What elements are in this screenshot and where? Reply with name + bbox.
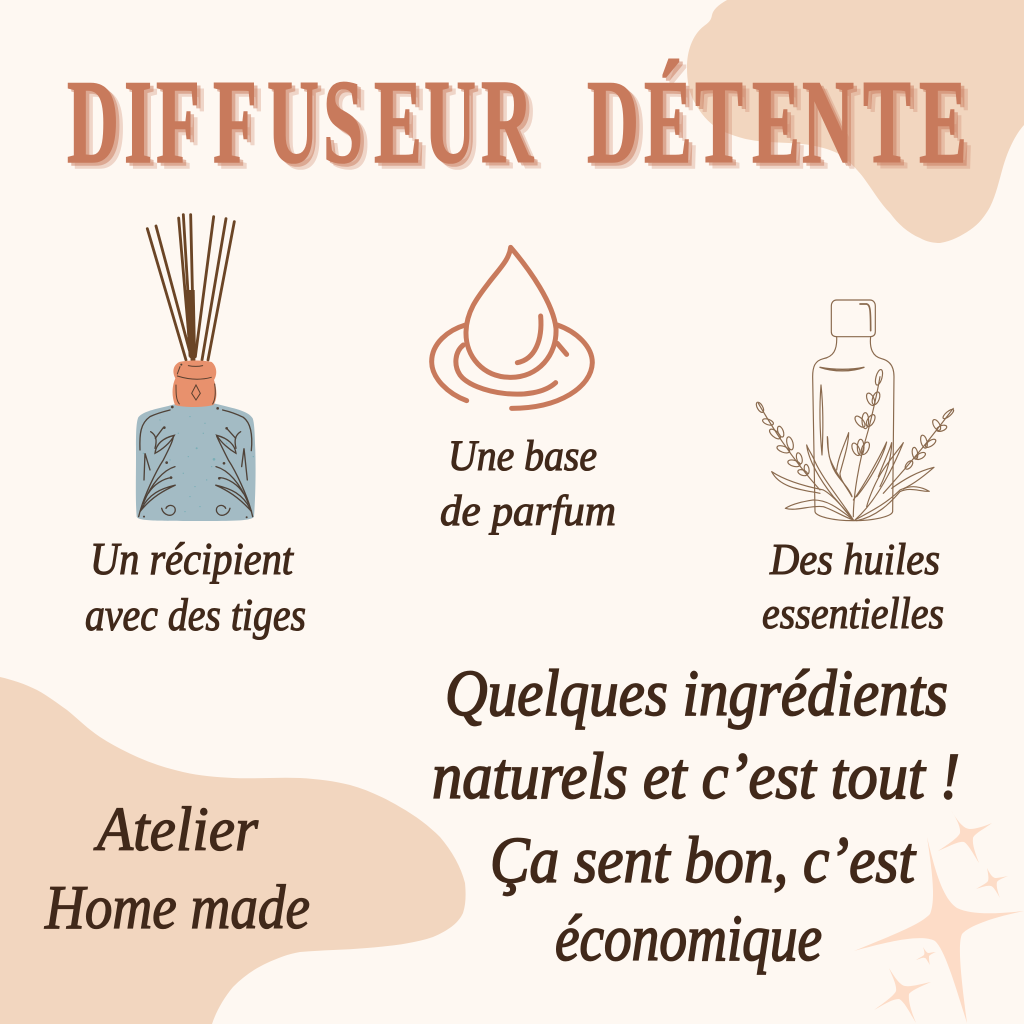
label: une base de parfum — [440, 433, 616, 535]
leaves — [772, 472, 853, 520]
main text block — [432, 657, 960, 975]
bottle speckles — [143, 416, 254, 512]
bottle foliage — [139, 410, 253, 517]
brand text: atelier home made: Home made — [44, 874, 310, 942]
label: un récipient avec des tiges — [85, 534, 306, 640]
label: un récipient avec des tiges: Un récipient — [90, 534, 294, 584]
label: des huiles essentielles: essentielles — [762, 589, 944, 638]
central lavender — [853, 377, 880, 517]
label: un récipient avec des tiges: avec des tiges — [85, 590, 306, 640]
brand text: atelier home made: Atelier — [93, 796, 259, 864]
title: DÉTENTE — [587, 56, 967, 189]
reeds — [147, 215, 234, 360]
bottle body — [136, 400, 256, 521]
label: des huiles essentielles — [762, 535, 944, 638]
main text block: Quelques ingrédients — [445, 657, 948, 730]
main text block: naturels et c’est tout ! — [432, 740, 960, 813]
icon: reed diffuser bottle — [136, 215, 256, 521]
brand text: atelier home made — [44, 796, 310, 942]
label: une base de parfum: de parfum — [440, 488, 616, 535]
blob: top right — [687, 0, 1024, 243]
blob: bottom left — [0, 677, 466, 1024]
sparkles — [854, 810, 1024, 1023]
title: DIFFUSEUR — [67, 56, 534, 189]
title — [67, 56, 967, 189]
label: une base de parfum: Une base — [448, 433, 597, 480]
bottle outline — [831, 300, 875, 337]
left lavender — [758, 403, 820, 490]
bottle stopper — [173, 360, 216, 407]
main text block: Ça sent bon, c’est — [490, 824, 916, 897]
icon: perfume drop — [432, 247, 592, 408]
main text block: économique — [555, 902, 822, 975]
icon: essential oil bottle with lavender — [755, 300, 955, 521]
right lavender — [883, 408, 953, 493]
label: des huiles essentielles: Des huiles — [769, 535, 940, 584]
